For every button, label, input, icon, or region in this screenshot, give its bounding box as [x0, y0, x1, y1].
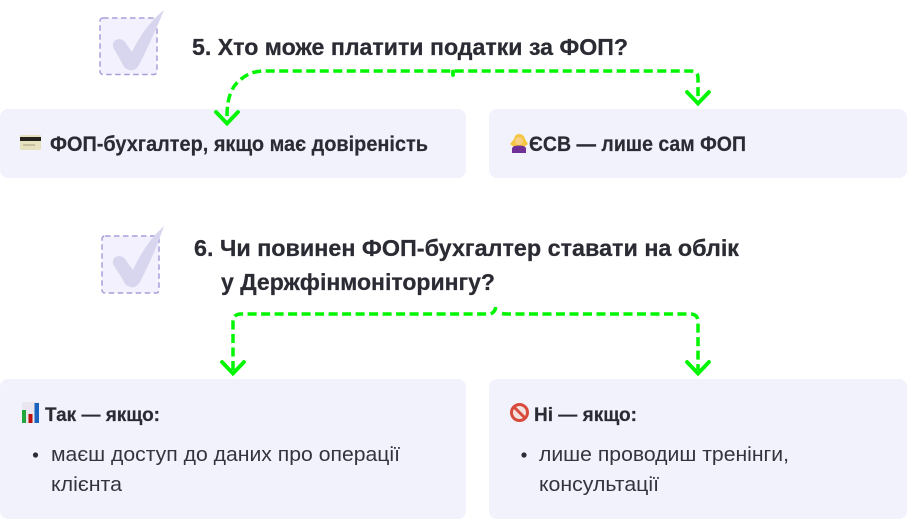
icon: checkbox 6 [102, 226, 164, 293]
bullet list [33, 443, 400, 496]
heading: question 5: 5. Хто може платити податки за ФОП? [192, 34, 628, 60]
card text: ЄСВ — лише сам ФОП [529, 133, 746, 156]
subheading: Так — якщо: [45, 404, 160, 426]
arrow head left [216, 112, 238, 124]
panel: no if [489, 379, 907, 519]
arrow head right [687, 362, 709, 374]
arrow: question 5 branches [216, 71, 709, 124]
card text: ФОП-бухгалтер, якщо має довіреність [50, 133, 428, 156]
icon: bar chart [22, 402, 39, 423]
icon: woman gesturing no [510, 134, 528, 153]
arrow: question 6 branches [222, 304, 709, 374]
heading: question 6: 6. Чи повинен ФОП-бухгалтер ставати на облік [194, 235, 739, 261]
subheading: Ні — якщо: [534, 404, 637, 426]
icon: prohibited sign [512, 404, 528, 420]
icon: credit card [20, 135, 41, 150]
heading: question 6 [194, 235, 739, 295]
bullet list: маєш доступ до даних про операції [51, 443, 400, 466]
panel: accountant with power of attorney [0, 109, 466, 178]
panel: yes if [0, 379, 466, 519]
bullet list [521, 443, 789, 496]
icon: checkbox 5 [100, 10, 164, 74]
bullet list: консультації [539, 473, 659, 496]
heading: question 6: у Держфінмоніторингу? [221, 269, 495, 295]
arrow head right [687, 92, 709, 104]
arrow head left [222, 362, 244, 374]
bullet list: лише проводиш тренінги, [539, 443, 789, 466]
panel: ESV only by FOP [489, 109, 907, 178]
bullet list: клієнта [51, 473, 123, 496]
